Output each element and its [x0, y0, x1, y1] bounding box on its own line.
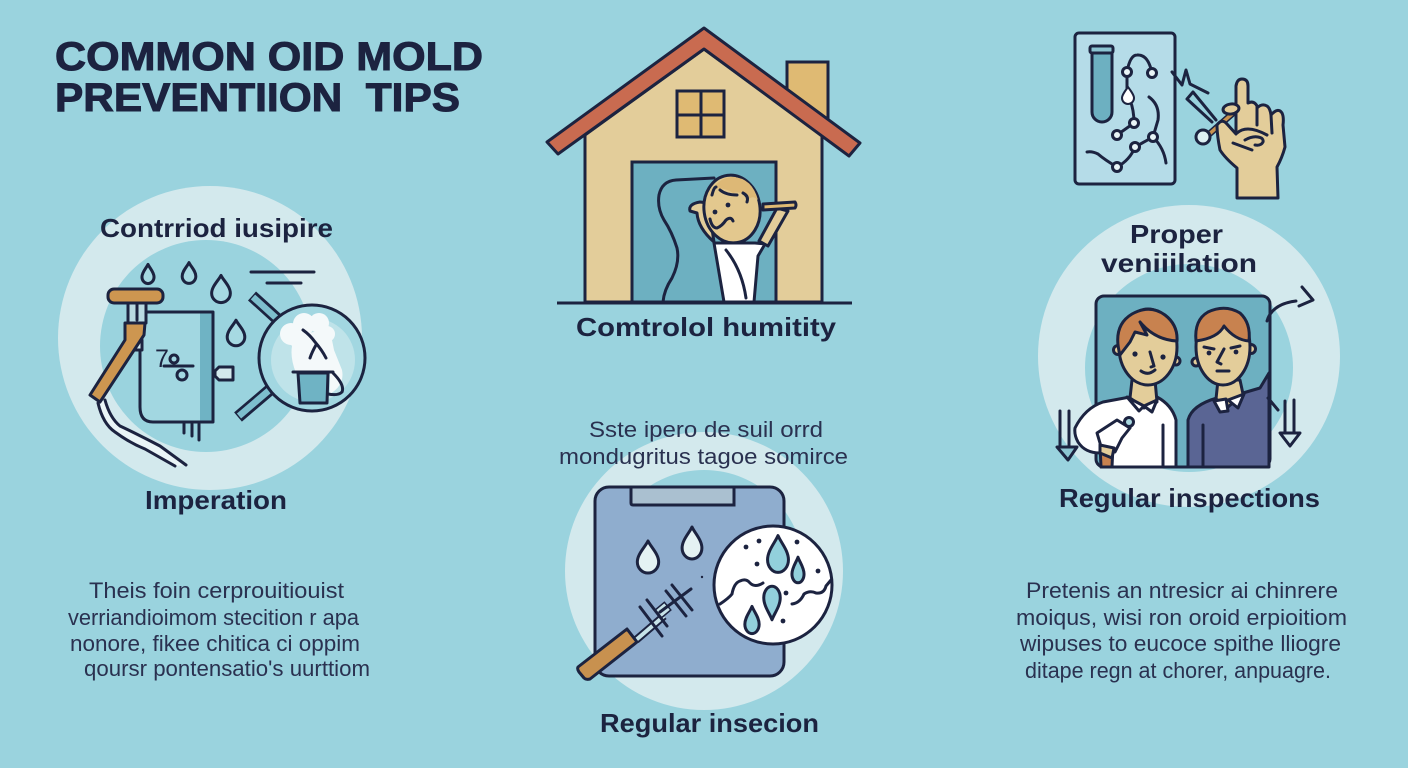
heading: right top: veniiilation — [1101, 248, 1257, 278]
frame — [1096, 296, 1270, 467]
swab tool — [1187, 92, 1232, 144]
icon: humidifier tank — [140, 312, 233, 440]
text block: right: moiqus, wisi ron oroid erpioitiom — [1016, 605, 1347, 630]
title: PREVENTIION TIPS — [55, 76, 460, 120]
test tube — [1090, 46, 1113, 122]
chimney — [787, 62, 828, 132]
arrow: curved top right — [1267, 287, 1313, 321]
panel: bottom circle clipboard — [565, 432, 843, 710]
icon: humidifier tank: 7 — [155, 345, 169, 373]
text block: left: qoursr pontensatio's uurttiom — [84, 656, 370, 681]
house body — [585, 49, 822, 302]
text block: right: Pretenis an ntresicr ai chinrere — [1026, 578, 1338, 603]
text block: right: ditape regn at chorer, anpuagre. — [1025, 658, 1331, 683]
person left — [1075, 309, 1180, 467]
icon: test tube chart and hand — [1075, 33, 1285, 198]
clipboard — [595, 487, 784, 676]
window — [677, 91, 724, 137]
magnifier lens — [714, 526, 832, 644]
text block: left — [68, 578, 370, 681]
text block: right: wipuses to eucoce spithe lliogre — [1019, 631, 1341, 656]
icon: house — [547, 28, 860, 303]
curtain — [659, 178, 714, 302]
icon: magnifier with mold — [238, 296, 365, 417]
title — [55, 35, 483, 120]
text block: right — [1016, 578, 1347, 683]
arrow: right down — [1280, 400, 1300, 446]
heading: right top — [1101, 219, 1257, 278]
panel: right circle people — [1038, 205, 1340, 507]
heading: right bottom: Regular inspections — [1059, 483, 1320, 513]
text block: left: nonore, fikee chitica ci oppim — [70, 631, 360, 656]
person — [690, 171, 796, 302]
text block: center — [559, 417, 848, 469]
panel: left circle humidifier — [58, 186, 365, 490]
brush — [578, 585, 692, 679]
text block: center: Sste ipero de suil orrd — [589, 417, 823, 442]
doorway — [632, 162, 776, 302]
text block: left: Theis foin cerprouitiouist — [89, 578, 344, 603]
icon: air lines — [251, 272, 314, 283]
roof — [547, 28, 860, 156]
title: COMMON OID MOLD — [55, 35, 483, 79]
hand — [1217, 79, 1285, 198]
heading: left bottom: Imperation — [145, 485, 287, 515]
heading: left top: Contrriod iusipire — [100, 213, 333, 243]
person right — [1188, 308, 1269, 467]
icon: pipe wand and hose — [90, 289, 186, 466]
spark lines — [1172, 70, 1208, 93]
text block: left: verriandioimom stecition r apa — [68, 605, 360, 630]
heading: center: Comtrolol humitity — [576, 312, 837, 342]
chart panel — [1075, 33, 1175, 184]
arrow: left down — [1057, 411, 1077, 460]
heading: bottom: Regular insecion — [600, 708, 819, 738]
heading: right top: Proper — [1130, 219, 1223, 249]
molecule network — [1087, 55, 1166, 172]
icon: water drops — [142, 263, 245, 346]
text block: center: mondugritus tagoe somirce — [559, 444, 848, 469]
ground line — [557, 302, 852, 304]
